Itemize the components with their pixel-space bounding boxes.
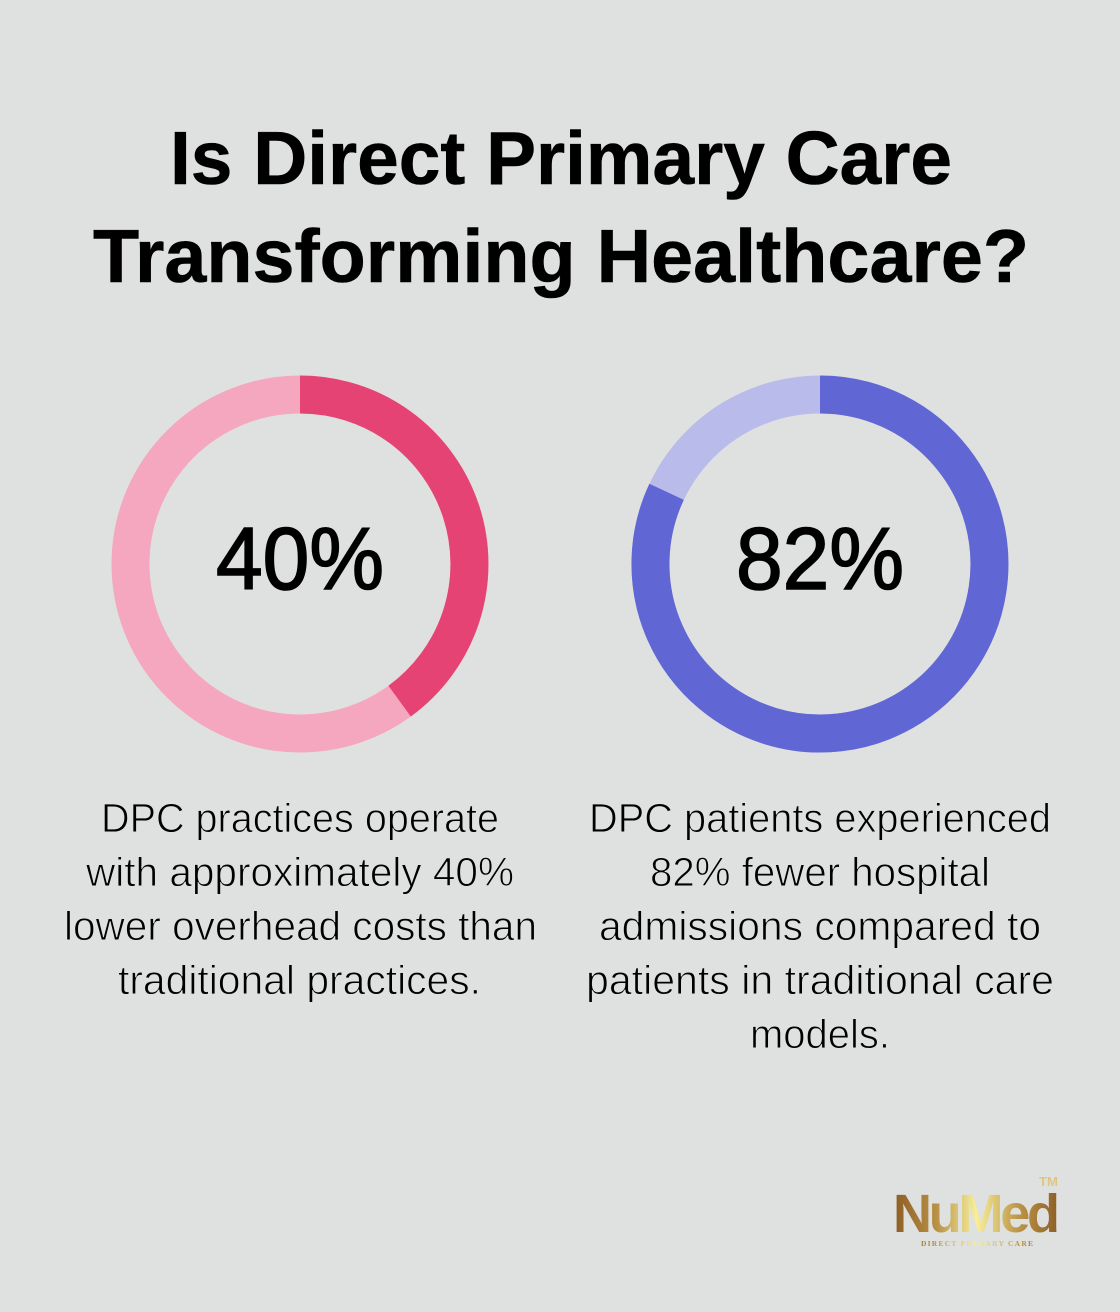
value: 82%: 82% — [736, 509, 904, 608]
title: Transforming Healthcare? — [93, 214, 1029, 298]
value: 40%: 40% — [216, 509, 384, 608]
title — [93, 116, 1029, 298]
text block: overhead costs — [64, 795, 537, 1003]
text block: overhead costs: with approximately 40% — [85, 849, 514, 895]
text block: overhead costs: traditional practices. — [118, 957, 481, 1003]
donut chart: 40% — [130, 394, 470, 734]
logo tagline: DIRECT PRIMARY CARE — [921, 1239, 1033, 1248]
logo: NuMed: NuMed — [893, 1184, 1060, 1244]
text block: hospital admissions — [586, 795, 1054, 1057]
donut chart: 82% — [650, 394, 990, 734]
text block: hospital admissions: admissions compared to — [599, 903, 1041, 949]
text block: overhead costs: lower overhead costs than — [64, 903, 537, 949]
text block: hospital admissions: DPC patients experienced — [589, 795, 1051, 841]
text block: overhead costs: DPC practices operate — [101, 795, 499, 841]
text block: hospital admissions: models. — [750, 1011, 890, 1057]
title: Is Direct Primary Care — [170, 116, 952, 200]
text block: hospital admissions: patients in traditional care — [586, 957, 1054, 1003]
logo trademark: TM — [1039, 1174, 1058, 1189]
text block: hospital admissions: 82% fewer hospital — [650, 849, 990, 895]
